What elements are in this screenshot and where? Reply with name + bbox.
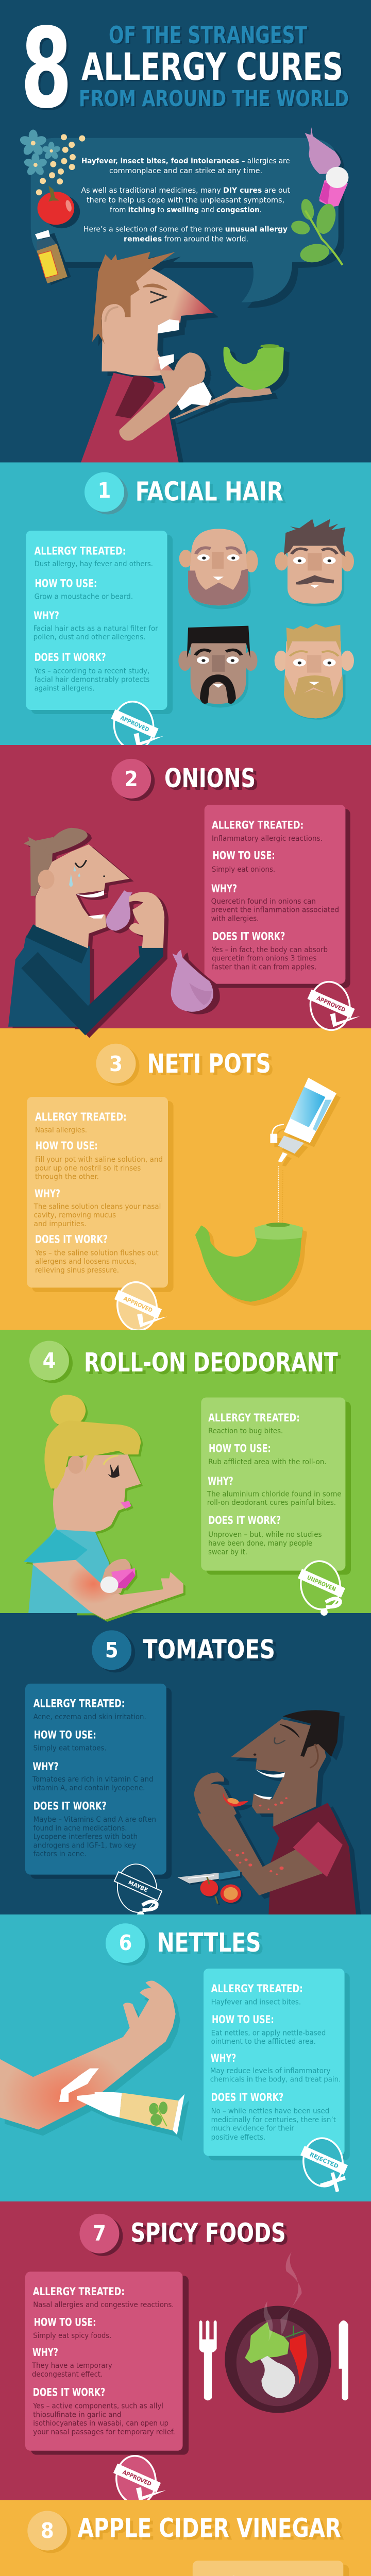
figure: hair (50, 1395, 86, 1427)
info card: facial hair: HOW TO USE: (35, 577, 97, 589)
info card: roll-on deodorant: The aluminium chloride found in some (207, 1490, 342, 1498)
heading: roll-on deodorant: ROLL-ON DEODORANT (84, 1348, 338, 1378)
icon: knife and tomatoes (177, 1870, 241, 1904)
figure: head (53, 1454, 141, 1532)
info card: tomatoes: Simply eat tomatoes. (33, 1744, 107, 1753)
heading: roll-on deodorant: 4 (43, 1348, 56, 1373)
heading: spicy foods: 7 (93, 2221, 106, 2246)
heading: neti pots (96, 1044, 271, 1086)
intro text: there to help us cope with the unpleasant symptoms, (87, 196, 284, 205)
info card: neti pots: HOW TO USE: (36, 1140, 98, 1152)
info card: roll-on deodorant: swear by it. (208, 1548, 247, 1556)
info card: facial hair: against allergens. (35, 685, 95, 693)
stamp: approved: APPROVED (315, 995, 346, 1013)
heading: tomatoes: TOMATOES (143, 1635, 275, 1665)
heading: facial hair: FACIAL HAIR (136, 477, 283, 507)
panel: section 5 tomatoes (25, 1630, 356, 1919)
illustration: four men with facial hair (178, 519, 354, 720)
stamp: unproven: UNPROVEN (306, 1574, 337, 1593)
figure: sweater (8, 924, 163, 1036)
info card: neti pots: through the other. (35, 1173, 99, 1181)
figure: hand (129, 892, 164, 948)
info card: neti pots: ALLERGY TREATED: (35, 1111, 127, 1123)
info card: spicy foods: Simply eat spicy foods. (33, 2332, 111, 2340)
info card: roll-on deodorant: ALLERGY TREATED: (208, 1412, 300, 1424)
icon: knife (339, 2320, 348, 2400)
stamp: approved: APPROVED (123, 1295, 154, 1314)
intro text: commonplace and can strike at any time. (109, 167, 262, 175)
info card: facial hair: ALLERGY TREATED: (35, 545, 126, 557)
info card: spicy foods: ALLERGY TREATED: (33, 2285, 125, 2298)
info card: onions: faster than it can from apples. (212, 963, 316, 971)
info card: neti pots: allergens and loosens mucus, (35, 1258, 137, 1266)
stamp: approved (113, 2453, 166, 2506)
icon: tomato slice (223, 1792, 248, 1807)
illustration: man eating tomato (194, 1710, 356, 1915)
heading: nettles (106, 1923, 261, 1965)
heading: onions: ONIONS (164, 764, 256, 794)
panel: section 6 nettles (0, 1914, 371, 2201)
title: OF THE STRANGEST (109, 21, 308, 49)
steam (264, 2252, 301, 2341)
info card: nettles: medicinally for centuries, there isn’t (211, 2116, 336, 2124)
info card: tomatoes (25, 1684, 172, 1879)
stamp: approved: APPROVED (119, 715, 150, 733)
info card: onions: HOW TO USE: (212, 849, 275, 861)
info card: tomatoes: WHY? (32, 1760, 58, 1773)
background: onions section (0, 745, 371, 1028)
heading: facial hair (85, 472, 283, 514)
icon: whole onion (171, 950, 213, 1012)
info card: tomatoes: Lycopene interferes with both (33, 1833, 138, 1841)
info card: nettles: ointment to the afflicted area. (211, 2038, 316, 2046)
illustration: sneezing man holding neti pot (81, 252, 284, 462)
heading: nettles: 6 (119, 1930, 132, 1955)
stamp: approved (307, 979, 360, 1032)
info card: roll-on deodorant: DOES IT WORK? (208, 1514, 281, 1527)
info card: spicy foods: thiosulfinate in garlic and (33, 2411, 122, 2419)
info card: nettles: May reduce levels of inflammatory (210, 2067, 331, 2075)
info card: tomatoes: vitamin A, and contain lycopene. (32, 1784, 145, 1792)
icon: roll-on deodorant (319, 167, 348, 207)
info card: neti pots: relieving sinus pressure. (35, 1266, 119, 1275)
info card: facial hair: facial hair demonstrably protects (35, 676, 149, 684)
info card: tomatoes: ALLERGY TREATED: (33, 1698, 125, 1710)
intro text: from itching to swelling and congestion. (110, 206, 262, 214)
info card: nettles: ALLERGY TREATED: (211, 1982, 303, 1995)
figure: head (231, 1719, 326, 1827)
figure: arm (197, 1814, 323, 1895)
panel: section 1 facial hair (0, 463, 371, 752)
intro text: As well as traditional medicines, many DIY cures are out (81, 187, 290, 195)
figure: arm (32, 1560, 183, 1620)
face: horseshoe moustache man (178, 626, 258, 707)
info card: nettles: Hayfever and insect bites. (211, 1998, 301, 2007)
panel: section 3 neti pots (27, 1044, 336, 1333)
info card: tomatoes: HOW TO USE: (34, 1728, 96, 1741)
stamp: approved (114, 1280, 167, 1333)
info card: spicy foods: decongestant effect. (32, 2370, 103, 2379)
info card: roll-on deodorant: HOW TO USE: (209, 1443, 271, 1455)
heading: onions (111, 759, 256, 801)
icon: saline bottle (270, 1078, 336, 1162)
illustration: woman applying roll-on (24, 1395, 183, 1620)
info card: facial hair: pollen, dust and other allergens. (33, 633, 145, 641)
info card: onions: Quercetin found in onions can (211, 897, 316, 906)
icon: nettle (290, 197, 342, 265)
icon: water drip (278, 1166, 279, 1224)
info card: nettles: much evidence for their (211, 2125, 295, 2133)
stamp: unproven (298, 1558, 345, 1616)
info card: onions: Simply eat onions. (212, 866, 275, 874)
figure: blue top (28, 1526, 113, 1613)
info card: spicy foods: your nasal passages for temporary relief. (33, 2428, 175, 2436)
intro text: remedies from around the world. (124, 235, 248, 243)
icon: ointment tube (77, 2092, 184, 2134)
figure: arm and hand (0, 1981, 176, 2129)
panel: section 7 spicy foods (0, 2201, 371, 2506)
info card: onions: Yes – in fact, the body can absorb (211, 946, 328, 954)
face: moustache man (275, 519, 354, 606)
heading: onions: 2 (125, 767, 138, 791)
stamp: rejected (300, 2136, 348, 2192)
rash spots (228, 1798, 288, 1875)
face: blond bearded man (275, 624, 354, 720)
info card: facial hair: Dust allergy, hay fever and others. (35, 560, 153, 568)
intro text (81, 157, 290, 243)
info card: spicy foods: WHY? (32, 2346, 58, 2359)
heading: spicy foods (79, 2214, 286, 2256)
icon: tomato (38, 185, 80, 228)
info card: nettles: Eat nettles, or apply nettle-based (211, 2029, 326, 2037)
info card: nettles (204, 1969, 350, 2160)
illustration: saline bottle pouring into neti pot (195, 1078, 336, 1302)
illustration: plate of spicy food (199, 2252, 348, 2413)
icon: plate (225, 2306, 331, 2413)
background: roll-on deodorant section (0, 1330, 371, 1613)
info card: onions: WHY? (211, 883, 237, 895)
info card: tomatoes: Maybe – Vitamins C and A are often (33, 1816, 156, 1824)
icon: roll-on in hand (100, 1559, 136, 1595)
info card: roll-on deodorant: roll-on deodorant cures painful bites. (207, 1499, 336, 1507)
info card: nettles: positive effects. (211, 2133, 265, 2142)
info card: spicy foods: HOW TO USE: (34, 2316, 96, 2329)
info card: neti pots: and impurities. (34, 1220, 87, 1228)
heading: roll-on deodorant (29, 1341, 338, 1383)
icon: flowers (19, 130, 61, 177)
info card: roll-on deodorant: Unproven – but, while no studies (208, 1531, 322, 1539)
icon: neti pot (195, 1223, 303, 1302)
info card: tomatoes: Tomatoes are rich in vitamin C and (32, 1775, 154, 1784)
stamp: approved (111, 699, 164, 752)
heading: apple cider vinegar: 8 (41, 2518, 54, 2543)
illustration: arm with ointment tube (0, 1981, 184, 2134)
info card: facial hair: Grow a moustache or beard. (35, 593, 133, 601)
info card: roll-on deodorant: have been done, many people (208, 1539, 312, 1548)
info card: onions (205, 805, 350, 988)
info card: tomatoes: DOES IT WORK? (33, 1800, 107, 1812)
info card: facial hair: Facial hair acts as a natural filter for (33, 624, 159, 633)
title: 8 (21, 5, 72, 133)
info card: neti pots: pour up one nostril so it rinses (35, 1164, 141, 1173)
info card: onions: Inflammatory allergic reactions. (212, 835, 323, 843)
background: tomatoes section (0, 1613, 371, 1914)
icon: garlic (260, 2356, 295, 2398)
info card: tomatoes: Acne, eczema and skin irritation. (33, 1713, 146, 1721)
info card: spicy foods: isothiocyanates in wasabi, can open up (33, 2419, 168, 2428)
info card: tomatoes: androgens and IGF-1, two key (33, 1841, 136, 1850)
ointment streak (59, 2069, 99, 2102)
info card: onions: ALLERGY TREATED: (212, 819, 303, 832)
info card: roll-on deodorant (201, 1397, 351, 1574)
heading: facial hair: 1 (98, 478, 111, 503)
info card: roll-on deodorant: Reaction to bug bites. (208, 1427, 283, 1435)
panel: section 4 roll-on deodorant (0, 1341, 351, 1620)
info card: facial hair: WHY? (33, 609, 59, 622)
info card: spicy foods: Nasal allergies and congestive reactions. (33, 2301, 174, 2309)
info card: neti pots (27, 1097, 174, 1292)
info card: spicy foods: Yes – active components, such as allyl (32, 2402, 163, 2411)
panel: intro section (0, 0, 371, 463)
info card: neti pots: Nasal allergies. (35, 1126, 87, 1134)
icon: vinegar bottle (35, 230, 71, 285)
heading: tomatoes (92, 1630, 275, 1672)
icon: pollen (36, 134, 85, 195)
info card: facial hair (26, 531, 173, 714)
info card: spicy foods (25, 2272, 189, 2455)
panel: section 2 onions (0, 759, 360, 1036)
stamp: approved: APPROVED (122, 2469, 153, 2487)
icons: allergens and remedies around the bubble (19, 127, 348, 285)
heading: spicy foods: SPICY FOODS (131, 2218, 286, 2248)
icon: onion held in hand (106, 890, 132, 931)
icon: fork (199, 2320, 217, 2400)
info card: nettles: WHY? (211, 2052, 236, 2064)
icon: onion (305, 127, 341, 174)
info card: neti pots: WHY? (35, 1188, 60, 1200)
icon: salad leaf (245, 2322, 289, 2363)
heading: apple cider vinegar: APPLE CIDER VINEGAR (78, 2514, 341, 2544)
info card: facial hair: Yes – according to a recent study, (34, 667, 149, 675)
figure: shirt (259, 1803, 356, 1915)
info card: onions: quercetin from onions 3 times (212, 955, 316, 963)
panel: section 8 apple cider vinegar (0, 2500, 371, 2576)
heading: nettles: NETTLES (157, 1928, 261, 1958)
info card: neti pots: The saline solution cleans your nasal (33, 1202, 161, 1211)
info card: spicy foods: DOES IT WORK? (33, 2386, 105, 2399)
intro text: Here’s a selection of some of the more unusual allergy (83, 226, 288, 234)
info card: tomatoes: found in acne medications. (33, 1824, 127, 1833)
info card: tomatoes: factors in acne. (33, 1850, 87, 1858)
info card: neti pots: cavity, removing mucus (34, 1211, 116, 1219)
info card: roll-on deodorant: WHY? (208, 1475, 233, 1487)
illustration: crying man eating onion (8, 828, 164, 1036)
background: neti pots section (0, 1028, 371, 1330)
speech bubble (31, 138, 344, 308)
info card: roll-on deodorant: Rub afflicted area with the roll-on. (208, 1458, 327, 1466)
stamp: maybe (114, 1861, 162, 1919)
face: bearded bald man (179, 529, 258, 609)
heading: neti pots: 3 (109, 1052, 123, 1076)
info card: onions: DOES IT WORK? (212, 930, 285, 942)
title (21, 5, 349, 133)
heading: apple cider vinegar (27, 2511, 341, 2553)
info card: nettles: No – while nettles have been used (211, 2107, 329, 2115)
intro text: Hayfever, insect bites, food intolerances – allergies are (81, 157, 290, 165)
info card: nettles: DOES IT WORK? (211, 2091, 283, 2104)
stamp: maybe: MAYBE (127, 1879, 149, 1894)
stamp: rejected: REJECTED (309, 2151, 340, 2170)
info card: neti pots: DOES IT WORK? (35, 1233, 108, 1246)
figure: head (24, 828, 130, 948)
heading: neti pots: NETI POTS (147, 1049, 271, 1079)
info card: nettles: HOW TO USE: (212, 2013, 274, 2026)
info card: facial hair: DOES IT WORK? (35, 651, 106, 664)
icon: chili peppers (290, 2334, 307, 2384)
info card: nettles: chemicals in the body, and treat pain. (210, 2076, 341, 2084)
info card: onions: prevent the inflammation associated (211, 906, 339, 914)
info card: spicy foods: They have a temporary (31, 2362, 112, 2370)
info card: onions: with allergies. (211, 915, 259, 923)
info card: apple cider vinegar (193, 2561, 349, 2576)
heading: tomatoes: 5 (105, 1638, 119, 1663)
info card: neti pots: Fill your pot with saline solution, and (35, 1156, 163, 1164)
info card: neti pots: Yes – the saline solution flushes out (35, 1249, 159, 1257)
